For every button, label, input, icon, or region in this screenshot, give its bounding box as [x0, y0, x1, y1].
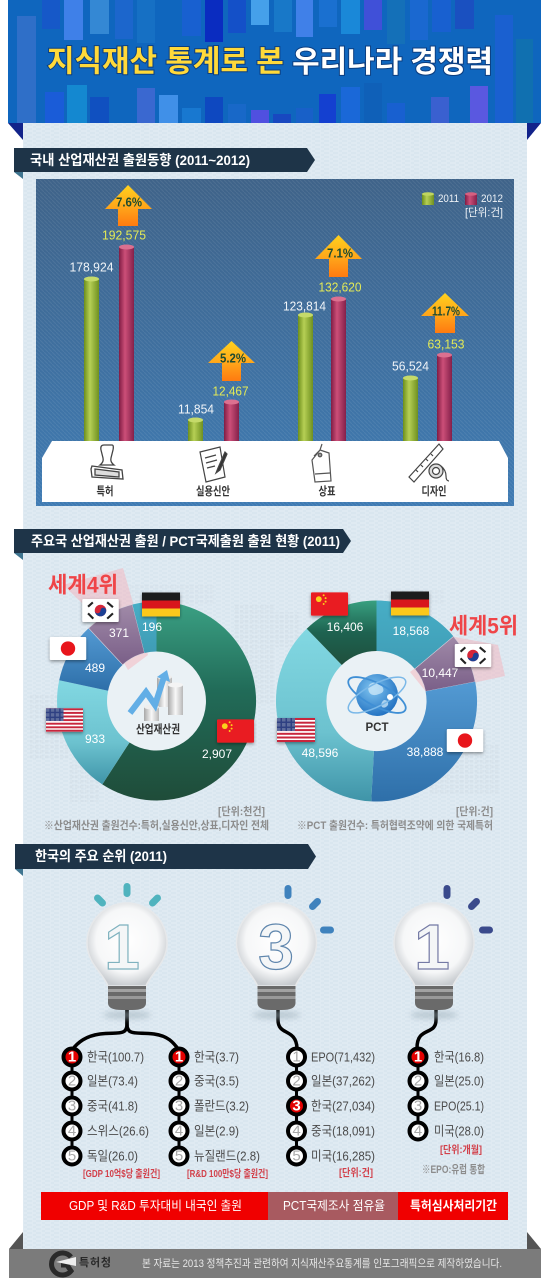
arrow: 11.7%: 11.7% — [432, 304, 460, 318]
ranking list: PCT — [288, 1048, 375, 1179]
ranking list: R&D: 4 — [175, 1122, 183, 1140]
legend — [422, 192, 503, 219]
ranking list: GDP: 1 — [68, 1048, 76, 1066]
slice values: 38,888 — [407, 745, 444, 759]
ranking list: PCT: EPO(71,432) — [311, 1050, 375, 1064]
footer note: 본 자료는 2013 정책추진과 관련하여 지식재산주요통계를 인포그래픽으로 제작하였습니다. — [142, 1256, 502, 1270]
slice values: 18,568 — [393, 624, 430, 638]
slice values: 48,596 — [302, 746, 339, 760]
title banner — [8, 0, 541, 140]
section header 3: 한국의 주요 순위 (2011) — [35, 848, 167, 864]
slice values — [302, 620, 459, 760]
icon: document and pen — [200, 447, 227, 482]
donut chart: PCT filings — [276, 592, 518, 832]
bars: design — [392, 336, 464, 443]
arrow: 7.1%: 7.1% — [327, 246, 353, 260]
icon: KIPO logo — [52, 1253, 76, 1275]
ranking list: GDP: 3 — [68, 1098, 76, 1114]
bulb 2: PCT search share rank — [236, 885, 334, 1019]
category bar — [41, 1192, 508, 1220]
ranking list: GDP: 중국(41.8) — [87, 1098, 138, 1114]
ranking list: PCT: 2 — [292, 1072, 301, 1090]
ranking list: GDP: 2 — [68, 1072, 76, 1090]
ranking list: examination period: 일본(25.0) — [434, 1074, 484, 1088]
category bar: GDP 및 R&D 투자대비 내국인 출원 — [69, 1199, 242, 1213]
slice values: 933 — [85, 732, 105, 746]
ranking list: PCT: 한국(27,034) — [311, 1098, 375, 1114]
ranking list: examination period: EPO(25.1) — [434, 1098, 484, 1114]
bars: trademark: 123,814 — [283, 298, 326, 314]
ranking list: GDP: 한국(100.7) — [87, 1050, 144, 1064]
world map dot texture — [30, 585, 500, 802]
center label: 산업재산권 — [136, 722, 180, 736]
ranking list: GDP: 4 — [68, 1122, 76, 1140]
ranking list: R&D: 뉴질랜드(2.8) — [194, 1148, 260, 1164]
label: design: 디자인 — [422, 485, 446, 498]
highlight wedge: Korea — [63, 568, 148, 670]
bars: design: 56,524 — [392, 358, 429, 374]
section header 3 — [15, 844, 316, 876]
slice values: 489 — [85, 661, 105, 675]
flags — [46, 592, 254, 743]
panel: filing trend bar chart — [36, 179, 514, 506]
bars: utility model: 11,854 — [178, 402, 214, 416]
footnote: ※산업재산권 출원건수:특허,실용신안,상표,디자인 전체 — [44, 818, 269, 832]
bars: trademark — [283, 280, 362, 443]
ranking list: examination period: 미국(28.0) — [434, 1124, 484, 1138]
ranking list: R&D: 폴란드(3.2) — [194, 1098, 249, 1114]
icon: globe with orbits — [344, 670, 410, 720]
ranking list: GDP: 스위스(26.6) — [87, 1124, 149, 1138]
section header 2 — [14, 529, 351, 560]
section header 1: 국내 산업재산권 출원동향 (2011~2012) — [30, 152, 250, 168]
icon: ruler and tape — [409, 444, 449, 482]
ranking list: GDP — [64, 1048, 160, 1180]
center label: PCT — [366, 722, 388, 734]
ranking list: examination period: [단위:개월] — [440, 1143, 482, 1156]
ranking list: GDP: 독일(26.0) — [87, 1148, 138, 1164]
ranking list: PCT: 일본(37,262) — [311, 1074, 375, 1088]
ranking list: R&D: 일본(2.9) — [194, 1124, 239, 1138]
arrow: 5.2% — [208, 341, 255, 381]
legend: 2011 — [438, 193, 459, 205]
ranking list: R&D: 2 — [175, 1072, 183, 1090]
ranking list: GDP: 일본(73.4) — [87, 1074, 138, 1088]
donut chart: industrial property filings — [44, 568, 269, 832]
bars: design: 63,153 — [428, 336, 464, 352]
legend: 2012 — [481, 193, 503, 205]
ranking list: R&D: 5 — [175, 1148, 183, 1164]
legend: [단위:건] — [465, 206, 503, 219]
ranking list: R&D: 1 — [175, 1048, 183, 1066]
label: trademark: 상표 — [318, 485, 336, 498]
ranking list: R&D: 한국(3.7) — [194, 1050, 239, 1064]
ranking list: examination period: 3 — [414, 1098, 422, 1114]
bars: patent: 178,924 — [70, 260, 114, 274]
highlight wedge: Korea — [410, 637, 505, 693]
bulb 1: GDP and R&D rank — [87, 883, 167, 1019]
label: patent: 특허 — [96, 485, 114, 498]
ranking list: examination period — [410, 1048, 485, 1176]
slice values: 196 — [142, 620, 162, 634]
section header 2: 주요국 산업재산권 출원 / PCT국제출원 출원 현황 (2011) — [31, 533, 340, 549]
bars: patent — [70, 228, 146, 443]
ranking list: PCT: 미국(16,285) — [311, 1148, 375, 1164]
slice values — [85, 620, 232, 761]
footer — [9, 1232, 541, 1278]
icon: tag — [312, 444, 331, 482]
arrow: 7.1% — [315, 235, 362, 277]
bars: trademark: 132,620 — [318, 280, 362, 294]
section header 1 — [14, 148, 315, 179]
ranking list: examination period: ※EPO:유럽 통합 — [422, 1162, 485, 1176]
callout: world rank 4: 세계4위 — [48, 572, 118, 598]
icon: rising arrow and cylinders — [130, 670, 183, 721]
ranking list: R&D — [170, 1048, 268, 1180]
bars: utility model — [178, 384, 248, 443]
ranking list: PCT: 1 — [292, 1048, 301, 1066]
unit note: [단위:건] — [456, 805, 493, 818]
ranking list: examination period: 2 — [414, 1072, 422, 1090]
ranking list: PCT: 4 — [292, 1122, 301, 1140]
category bar: 특허심사처리기간 — [410, 1198, 497, 1213]
ranking list: PCT: [단위:건] — [339, 1166, 373, 1179]
category bar: PCT국제조사 점유율 — [283, 1199, 385, 1213]
ranking list: R&D: 중국(3.5) — [194, 1074, 239, 1088]
ranking list: R&D: 3 — [175, 1098, 183, 1114]
ranking list: examination period: 1 — [414, 1048, 422, 1066]
ranking list: PCT: 5 — [292, 1148, 301, 1164]
slice values: 2,907 — [202, 747, 232, 761]
footnote: ※PCT 출원건수: 특허협력조약에 의한 국제특허 — [297, 818, 493, 832]
ranking list: PCT: 중국(18,091) — [311, 1124, 375, 1138]
bars: patent: 192,575 — [102, 228, 146, 242]
arrow: 7.6%: 7.6% — [116, 194, 142, 210]
arrow: 7.6% — [105, 185, 152, 226]
label: utility model: 실용신안 — [196, 485, 230, 498]
ranking list: examination period: 한국(16.8) — [434, 1050, 484, 1064]
ranking list: examination period: 4 — [414, 1122, 422, 1140]
category strip — [42, 441, 508, 502]
ranking list: PCT: 3 — [292, 1098, 301, 1114]
ranking list: GDP: 5 — [68, 1148, 76, 1164]
arrow: 5.2%: 5.2% — [220, 350, 246, 366]
bulb 3: examination period rank — [394, 885, 493, 1019]
arrow: 11.7% — [421, 293, 469, 333]
bulb 1: GDP and R&D rank: 1 — [104, 911, 140, 983]
callout: world rank 5: 세계5위 — [449, 614, 518, 638]
bulb 2: PCT search share rank: 3 — [258, 911, 294, 983]
bulb 3: examination period rank: 1 — [414, 911, 450, 983]
flags — [277, 592, 491, 752]
title text: 지식재산 통계로 본 우리나라 경쟁력 — [47, 46, 493, 78]
ranking list: GDP: [GDP 10억$당 출원건] — [83, 1167, 160, 1180]
bars: utility model: 12,467 — [212, 384, 248, 398]
icon: stamp — [91, 445, 123, 479]
ranking list: R&D: [R&D 100만$당 출원건] — [187, 1167, 268, 1180]
organisation name: 특허청 — [79, 1255, 111, 1269]
slice values: 16,406 — [327, 620, 364, 634]
slice values: 371 — [109, 626, 129, 640]
slice values: 10,447 — [422, 666, 459, 680]
wires — [72, 1008, 436, 1156]
unit note: [단위:천건] — [218, 804, 265, 818]
